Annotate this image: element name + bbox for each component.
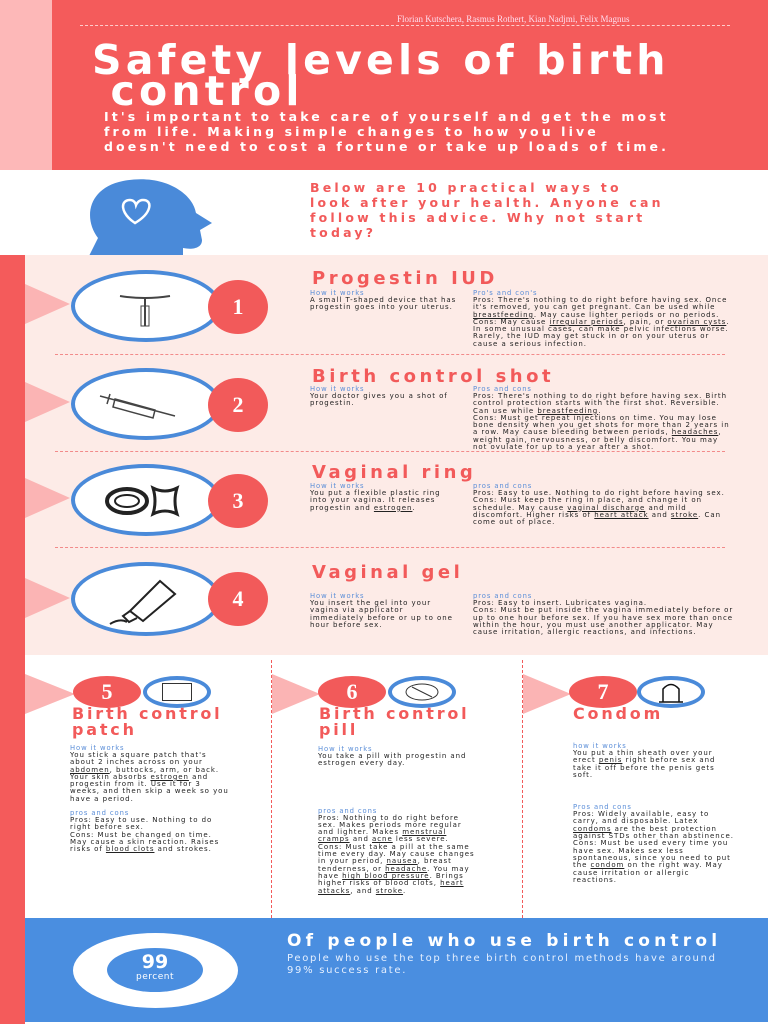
column 5: You stick a square patch that's about 2 inches across on your abdomen, buttocks, arm, or back. Your skin absorbs estrogen and progestin from it. Use it for 3 weeks, and then skip a week so you have a period. xyxy=(70,751,229,803)
column 6: Pros: Nothing to do right before sex. Makes periods more regular and lighter. Makes menstrual cramps and acne less severe. xyxy=(318,814,462,843)
column 6: 6 xyxy=(346,679,358,704)
stat heading: Of people who use birth control xyxy=(287,931,721,951)
item 3: Pros: Easy to use. Nothing to do right before having sex. xyxy=(473,489,725,497)
item 3: How it works xyxy=(310,482,364,490)
column 6: pill xyxy=(319,720,358,739)
item 2: How it works xyxy=(310,385,364,393)
column 5: Pros: Easy to use. Nothing to do right before sex. xyxy=(70,816,212,831)
intro text xyxy=(310,180,664,240)
icon: IUD xyxy=(71,270,221,342)
icon: gel tube xyxy=(71,562,221,636)
donut chart: 99 xyxy=(142,951,168,973)
icon: patch xyxy=(143,676,211,708)
intro text: look after your health. Anyone can xyxy=(310,195,664,210)
item 2: Pros: There's nothing to do right before having sex. Birth control protection starts with the first shot. Reversible. Can use while breastfeeding. xyxy=(473,392,727,415)
column 5: Birth control xyxy=(72,704,222,723)
subtitle: It's important to take care of yourself and get the most xyxy=(104,109,669,124)
icon: pill xyxy=(388,676,456,708)
panel: stat band: People who use the top three birth control methods have around xyxy=(287,953,717,964)
title: control xyxy=(110,67,304,115)
item 4: Pros: Easy to insert. Lubricates vagina. xyxy=(473,599,647,607)
item 2: Your doctor gives you a shot of progestin. xyxy=(310,392,448,407)
intro text: Below are 10 practical ways to xyxy=(310,180,622,195)
column 5: Cons: Must be changed on time. May cause a skin reaction. Raises risks of blood clots and strokes. xyxy=(70,831,219,853)
item 1: Progestin IUD xyxy=(312,268,498,289)
item 1: How it works xyxy=(310,289,364,297)
title: Safety levels of birth xyxy=(92,36,670,84)
item 1 xyxy=(25,268,729,348)
icon: head with heart xyxy=(90,179,212,255)
column 5: 5 xyxy=(102,679,112,704)
column 7: Pros: Widely available, easy to carry, and disposable. Latex condoms are the best protection against STDs other than abstinence. xyxy=(573,810,734,840)
column 7: 7 xyxy=(598,679,608,704)
subtitle: from life. Making simple changes to how you live xyxy=(104,124,599,139)
column 6: How it works xyxy=(318,745,372,753)
item 2: Pros and cons xyxy=(473,385,532,393)
column 6: Birth control xyxy=(319,704,469,723)
column 5: pros and cons xyxy=(70,809,129,817)
column 6: Cons: Must take a pill at the same time every day. May cause changes in your period, nausea, breast tenderness, or headache. You may have high blood pressure. Brings higher risks of blood clots, heart attacks, and stroke. xyxy=(318,843,475,895)
item 2: Birth control shot xyxy=(312,366,554,387)
item 3: pros and cons xyxy=(473,482,532,490)
column 5: How it works xyxy=(70,744,124,752)
icon: syringe xyxy=(71,368,221,440)
donut chart: percent xyxy=(136,972,174,982)
intro text: today? xyxy=(310,225,376,240)
item 3 xyxy=(25,462,725,536)
item 1: Pro's and con's xyxy=(473,289,537,297)
icon: condom xyxy=(637,676,705,708)
item 2: 2 xyxy=(232,392,244,417)
header panel xyxy=(52,0,768,170)
item 1: Pros: There's nothing to do right before having sex. Once it's removed, you can get pregnant. Can be used while breastfeeding. May cause lighter periods or no periods. xyxy=(473,296,727,319)
panel: methods 1-4 xyxy=(25,255,768,655)
authors: Florian Kutschera, Rasmus Rothert, Kian Nadjmi, Felix Magnus xyxy=(397,14,629,24)
icon: ring xyxy=(71,464,221,536)
item 4: You insert the gel into your vagina via applicator immediately before or up to one hour before sex. xyxy=(310,599,453,629)
column 5 xyxy=(25,674,229,853)
top left pale strip xyxy=(0,0,52,170)
item 1: A small T-shaped device that has progestin goes into your uterus. xyxy=(310,296,456,311)
subtitle xyxy=(104,109,669,154)
item 4 xyxy=(25,562,733,636)
item 4: Vaginal gel xyxy=(312,562,463,583)
column 6: You take a pill with progestin and estrogen every day. xyxy=(318,752,466,767)
item 3: 3 xyxy=(232,488,244,513)
column 7: Pros and cons xyxy=(573,803,632,811)
item 4: 4 xyxy=(232,586,244,611)
left red strip xyxy=(0,255,25,1024)
column 7: You put a thin sheath over your erect penis right before sex and take it off before the penis gets soft. xyxy=(573,749,715,779)
item 4: Cons: Must be put inside the vagina immediately before or up to one hour before sex. If you have sex more than once within the hour, you must use another applicator. May cause irritation, allergic reactions, and infections. xyxy=(473,606,733,636)
item 2: Cons: Must get repeat injections on time. You may lose bone density when you get shots for more than 2 years in a row. May cause bleeding between periods, headaches, weight gain, nervousness, or belly discomfort. You may not ovulate for up to a year after a shot. xyxy=(473,414,730,451)
item 1: 1 xyxy=(232,294,244,319)
subtitle: doesn't need to cost a fortune or take up loads of time. xyxy=(104,139,669,154)
item 2 xyxy=(25,366,730,451)
column 7 xyxy=(523,674,734,884)
item 3: Vaginal ring xyxy=(312,462,476,483)
donut chart xyxy=(73,933,238,1008)
column 7: how it works xyxy=(573,742,627,750)
column 7: Condom xyxy=(573,704,663,723)
column 5: patch xyxy=(72,720,137,739)
item 4: pros and cons xyxy=(473,592,532,600)
panel: stat band xyxy=(25,918,768,1022)
item 1: Cons: May cause irregular periods, pain, or ovarian cysts. In some unusual cases, can make pelvic infections worse. Rarely, the IUD may get stuck in or on your uterus or cause a serious infection. xyxy=(473,318,729,348)
title xyxy=(92,36,670,115)
column 6 xyxy=(272,674,475,895)
column 6: pros and cons xyxy=(318,807,377,815)
item 4: How it works xyxy=(310,592,364,600)
item 3: You put a flexible plastic ring into your vagina. It releases progestin and estrogen. xyxy=(310,489,440,512)
intro text: follow this advice. Why not start xyxy=(310,210,645,225)
item 3: Cons: Must keep the ring in place, and change it on schedule. May cause vaginal discharge and mild discomfort. Higher risks of heart attack and stroke. Can come out of place. xyxy=(473,496,721,526)
panel: stat band: 99% success rate. xyxy=(287,965,407,976)
column 7: Cons: Must be used every time you have sex. Makes sex less spontaneous, since you need to put the condom on the right way. May cause irritation or allergic reactions. xyxy=(573,839,731,884)
